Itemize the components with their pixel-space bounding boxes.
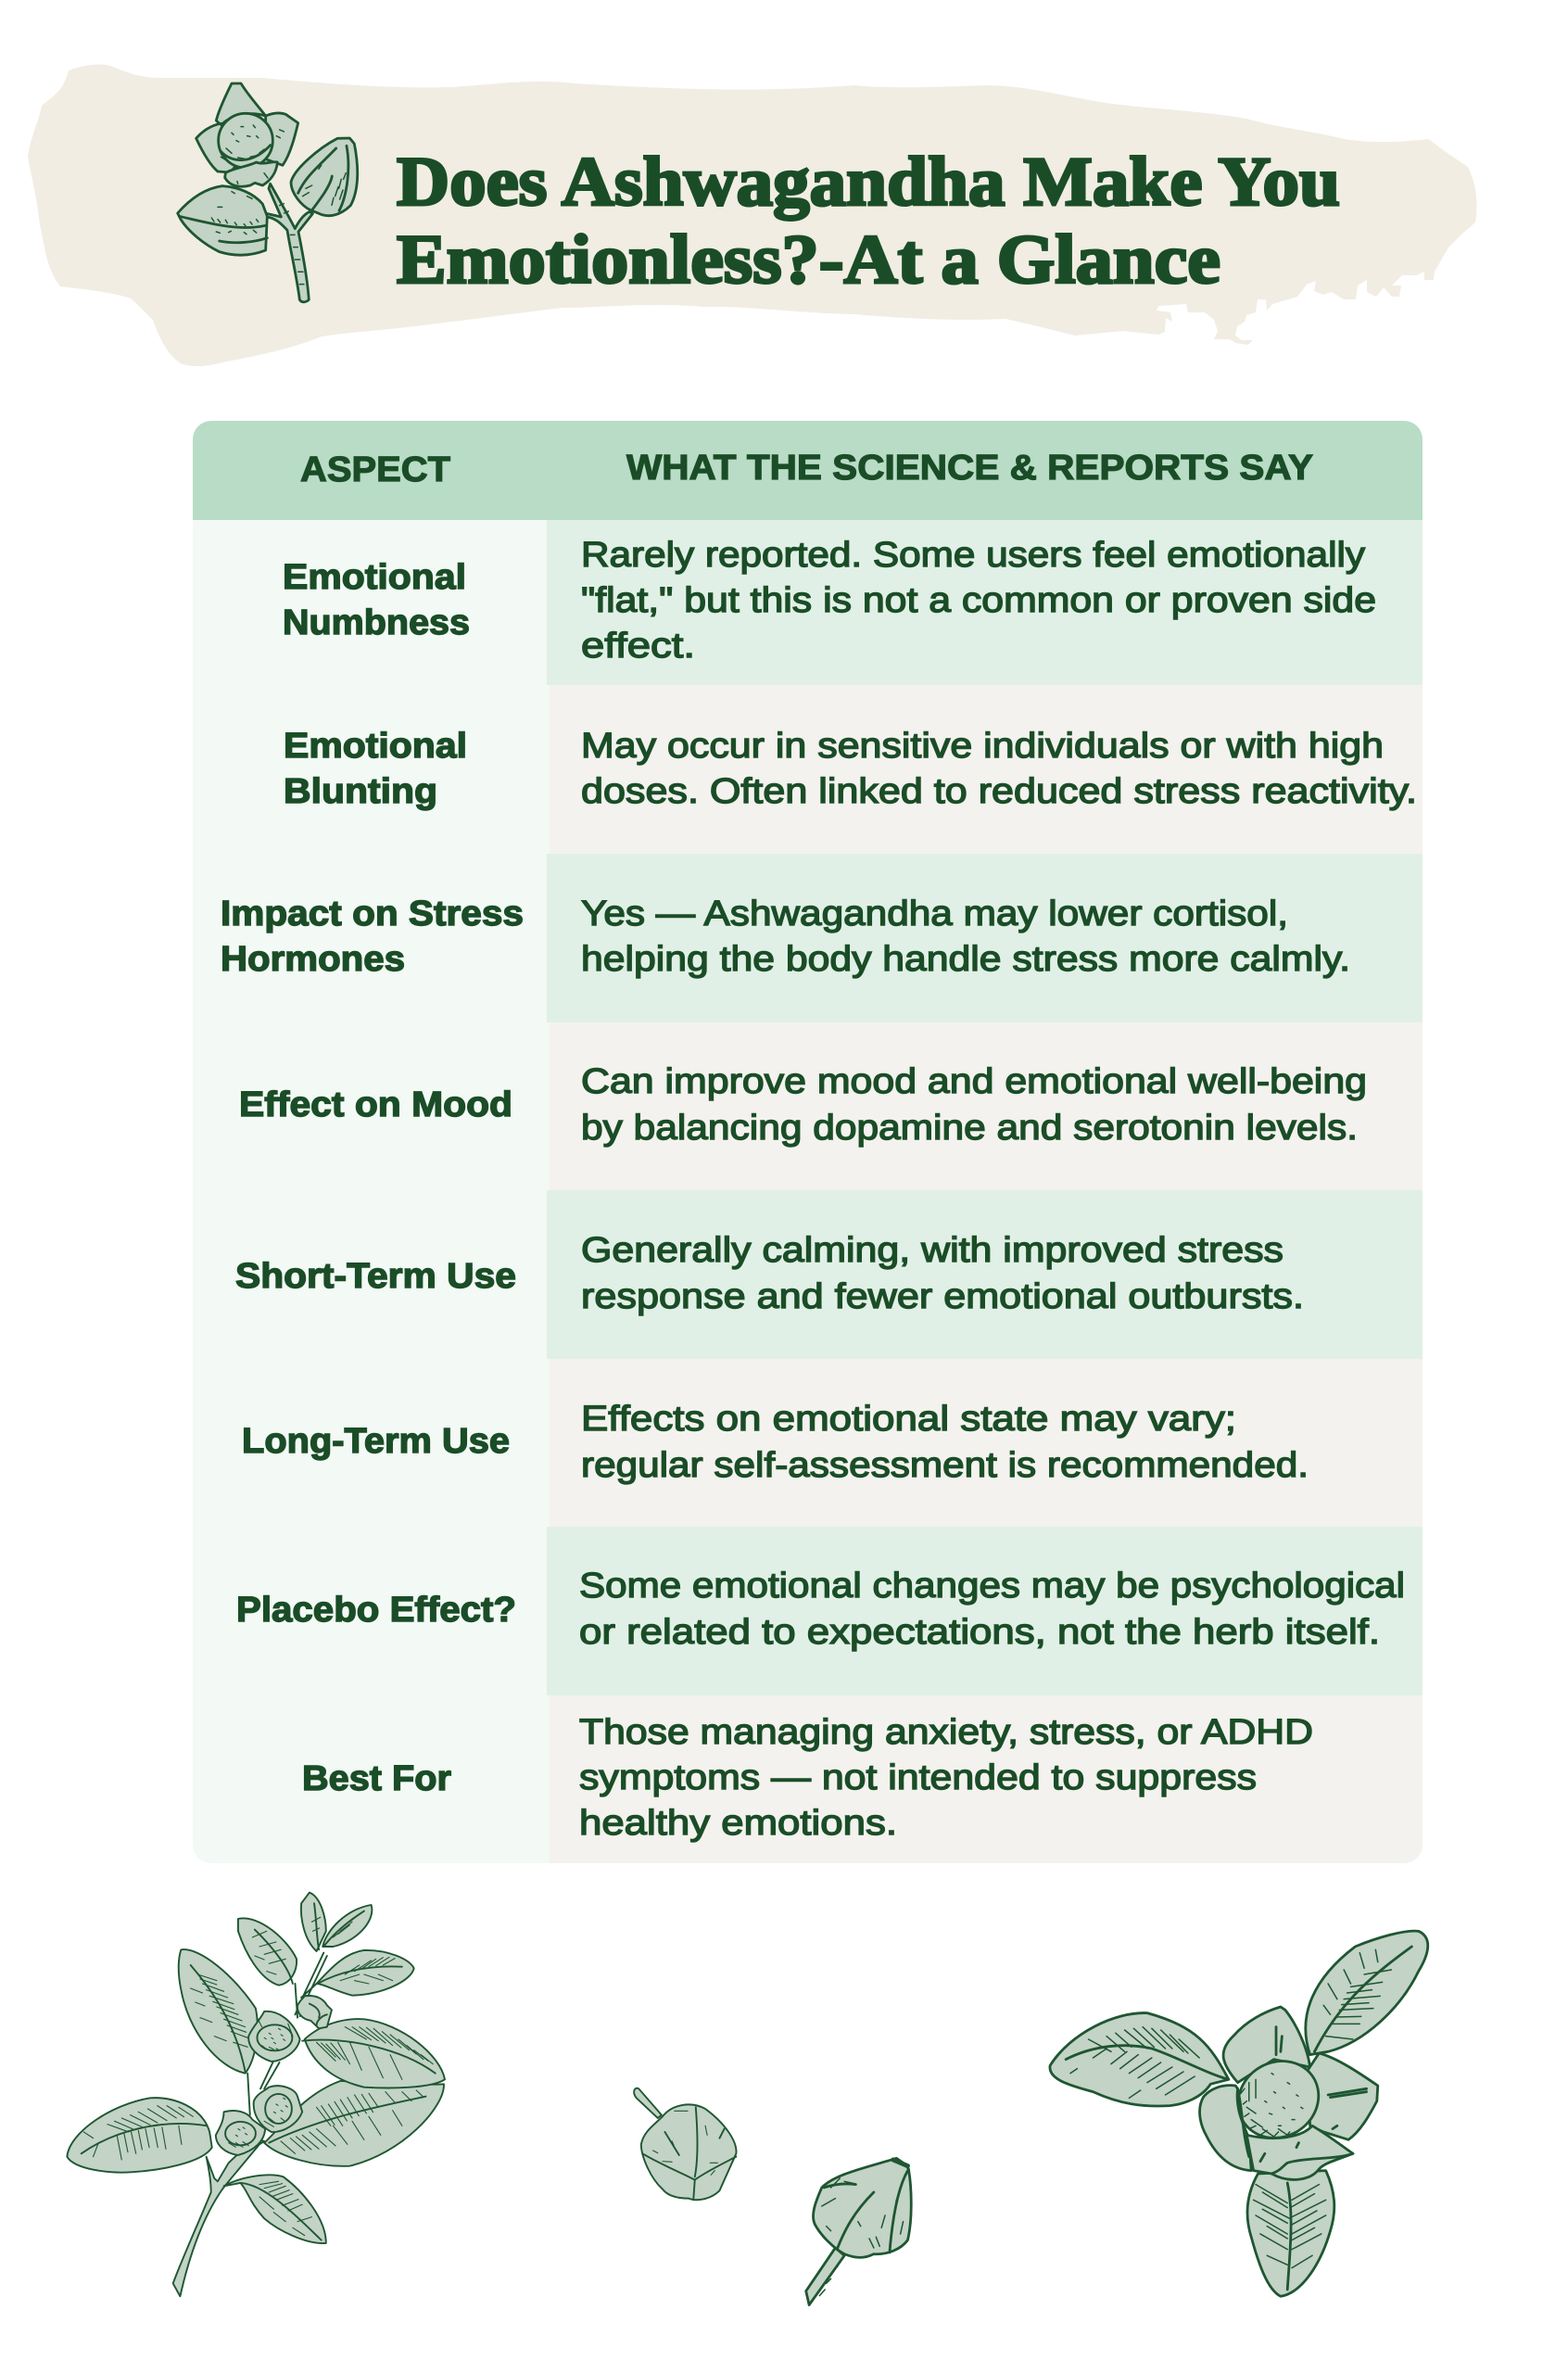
fruit cross hatching and dots [1241,2074,1303,2137]
row: best for [302,1713,1313,1843]
leaf left [67,2098,212,2173]
icon: small ashwagandha sprig in banner [178,83,358,302]
row: effect on mood: Can improve mood and emotional well-being [581,1062,1367,1101]
fruit 3 [254,2086,302,2132]
leaf large right bottom [264,2081,444,2166]
row: emotional blunting: doses. Often linked to reduced stress reactivity. [581,772,1417,811]
illustration: open flower with leaves [1050,1931,1428,2296]
table header: ASPECT [300,450,450,489]
row: emotional numbness: Numbness [283,603,470,642]
leaf hatching [83,1914,433,2236]
title [397,144,1340,298]
leaf top [301,1893,326,1951]
row: impact on stress hormones: Hormones [221,940,405,979]
flower lower petal [1246,2126,1353,2179]
row: short-term use: Generally calming, with improved stress [581,1231,1283,1270]
row: impact on stress hormones [221,895,1350,979]
row: placebo effect [236,1567,1405,1652]
row: placebo effect: or related to expectations, not the herb itself. [579,1613,1380,1652]
table background panels [193,421,1424,1863]
row: long-term use: regular self-assessment is recommended. [581,1446,1309,1485]
row: emotional numbness: effect. [581,627,695,666]
leaf top right [322,1905,372,1947]
leaf bottom [224,2175,326,2243]
row: emotional numbness: "flat," but this is not a common or proven side [581,581,1376,620]
leaf right small [317,1950,414,1996]
sprig right bud [291,138,358,216]
leaf top middle [238,1918,297,1986]
row: emotional numbness: Rarely reported. Some users feel emotionally [581,536,1365,575]
table header: WHAT THE SCIENCE & REPORTS SAY [626,449,1313,488]
row: impact on stress hormones: Yes — Ashwagandha may lower cortisol, [581,895,1288,933]
row: short-term use: response and fewer emotional outbursts. [581,1277,1304,1316]
flower leaf top right [1306,1931,1428,2055]
leaf large right top [305,2019,445,2087]
table header [300,449,1313,489]
row: short-term use [235,1231,1304,1316]
row: best for: Those managing anxiety, stress, or ADHD [579,1713,1313,1752]
row: emotional numbness [283,536,1376,666]
row: placebo effect: Placebo Effect? [236,1591,516,1630]
sprig left bud [178,186,267,255]
row: short-term use: Short-Term Use [235,1257,516,1296]
row: long-term use: Long-Term Use [242,1422,510,1461]
title banner: torn paint brush background [28,64,1476,366]
leaf upper left [179,1949,258,2074]
flower right petal [1308,2053,1378,2139]
row: best for: symptoms — not intended to suppress [579,1758,1257,1797]
row: effect on mood: Effect on Mood [239,1085,512,1124]
illustration: ashwagandha branch [67,1893,445,2296]
bud body [641,2104,736,2200]
row: effect on mood [239,1062,1367,1148]
sprig lower petal [225,162,277,186]
fruit 1 [248,2011,300,2062]
sprig top petal [216,83,266,125]
row: best for: healthy emotions. [579,1804,897,1843]
row: emotional blunting: Emotional [284,727,467,766]
title line 1: Does Ashwagandha Make You [397,144,1340,221]
row: emotional blunting: May occur in sensitive individuals or with high [581,727,1384,766]
flower left petal [1200,2086,1251,2171]
row: emotional blunting: Blunting [284,772,437,811]
comparison table [193,421,1424,1863]
sprig left petal [196,123,238,172]
leaf hatching [1070,1949,1391,2268]
flower fruit [1231,2058,1325,2141]
row: effect on mood: by balancing dopamine and serotonin levels. [581,1109,1358,1148]
sprig fruit [219,113,272,168]
leaf midribs [1066,1947,1411,2290]
bud stem [634,2088,662,2118]
title line 2: Emotionless?-At a Glance [397,222,1220,298]
row: emotional blunting [284,727,1417,811]
sprig right petal [266,113,298,165]
row: impact on stress hormones: Impact on Stress [221,895,524,933]
row: long-term use [242,1400,1309,1485]
row: best for: Best For [302,1759,451,1798]
row: placebo effect: Some emotional changes may be psychological [579,1567,1405,1605]
bud body [813,2158,911,2257]
illustration: small bud with stem right [806,2158,911,2305]
branch stems [173,2138,264,2296]
flower leaf bottom [1247,2171,1334,2296]
flower top petal [1223,2007,1310,2083]
flower leaf left [1050,2013,1229,2106]
leaf veins [82,1903,436,2240]
sprig stem [265,184,312,302]
fruit 4 [216,2111,265,2155]
fruit 2 small [297,1996,332,2028]
bud stem [806,2248,844,2305]
row: impact on stress hormones: helping the body handle stress more calmly. [581,940,1350,979]
row: long-term use: Effects on emotional state may vary; [581,1400,1236,1439]
illustration: small bud with stem left [634,2088,736,2200]
row: emotional numbness: Emotional [283,558,466,597]
